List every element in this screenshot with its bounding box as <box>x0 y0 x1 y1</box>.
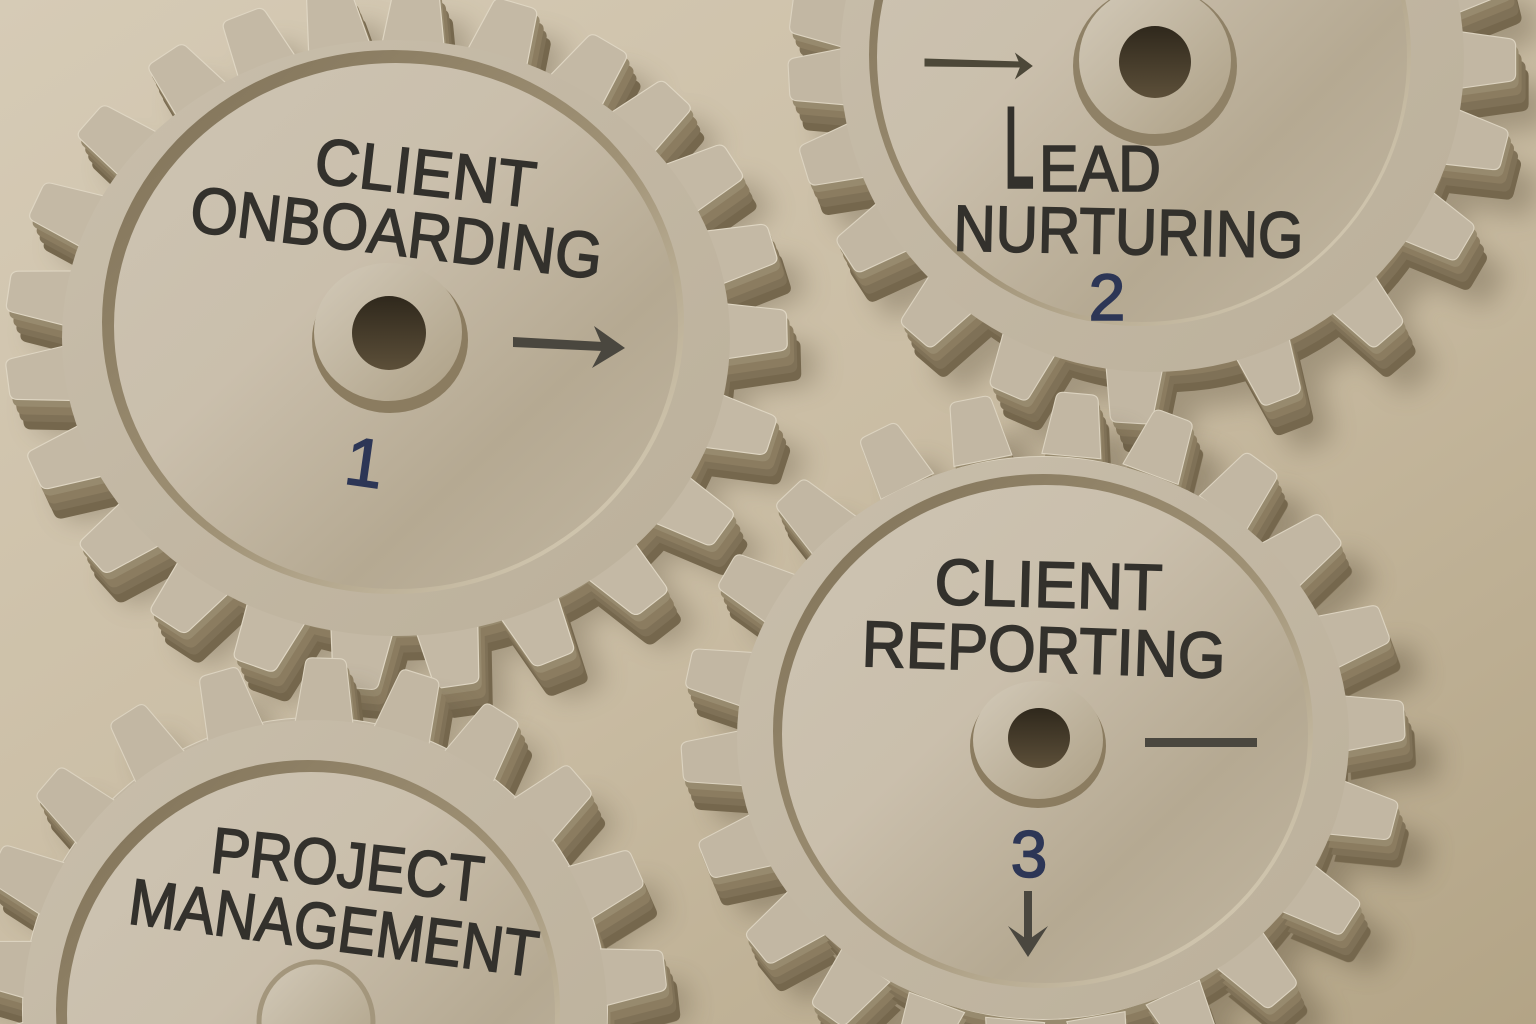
arrow 1 <box>513 326 625 368</box>
arrow 2 <box>925 54 1032 78</box>
hub 1 <box>312 263 468 413</box>
number 2: 2 <box>1089 260 1125 334</box>
dash line <box>1145 738 1257 747</box>
gear 1: client onboarding <box>4 0 816 725</box>
label: lead: EAD <box>1039 132 1161 205</box>
label: lead <box>1004 85 1161 212</box>
number 1: 1 <box>341 423 389 503</box>
number 3: 3 <box>1011 817 1047 891</box>
label: management: MANAGEMENT <box>125 865 543 991</box>
label: reporting: REPORTING <box>861 607 1227 692</box>
gear 3: client reporting <box>680 391 1439 1024</box>
gear 4: project management <box>0 657 693 1024</box>
gear 2: lead nurturing <box>787 0 1536 471</box>
label: client: CLIENT <box>311 124 540 221</box>
label: onboarding: ONBOARDING <box>187 172 606 293</box>
hub 2 <box>1073 0 1237 146</box>
label: lead: L <box>1004 85 1034 212</box>
label: nurturing: NURTURING <box>953 191 1304 272</box>
hub 4 <box>259 962 373 1024</box>
hub 3 <box>970 681 1106 808</box>
label: project: PROJECT <box>207 813 488 916</box>
label: client: CLIENT <box>934 545 1164 624</box>
arrow down <box>1008 891 1048 957</box>
